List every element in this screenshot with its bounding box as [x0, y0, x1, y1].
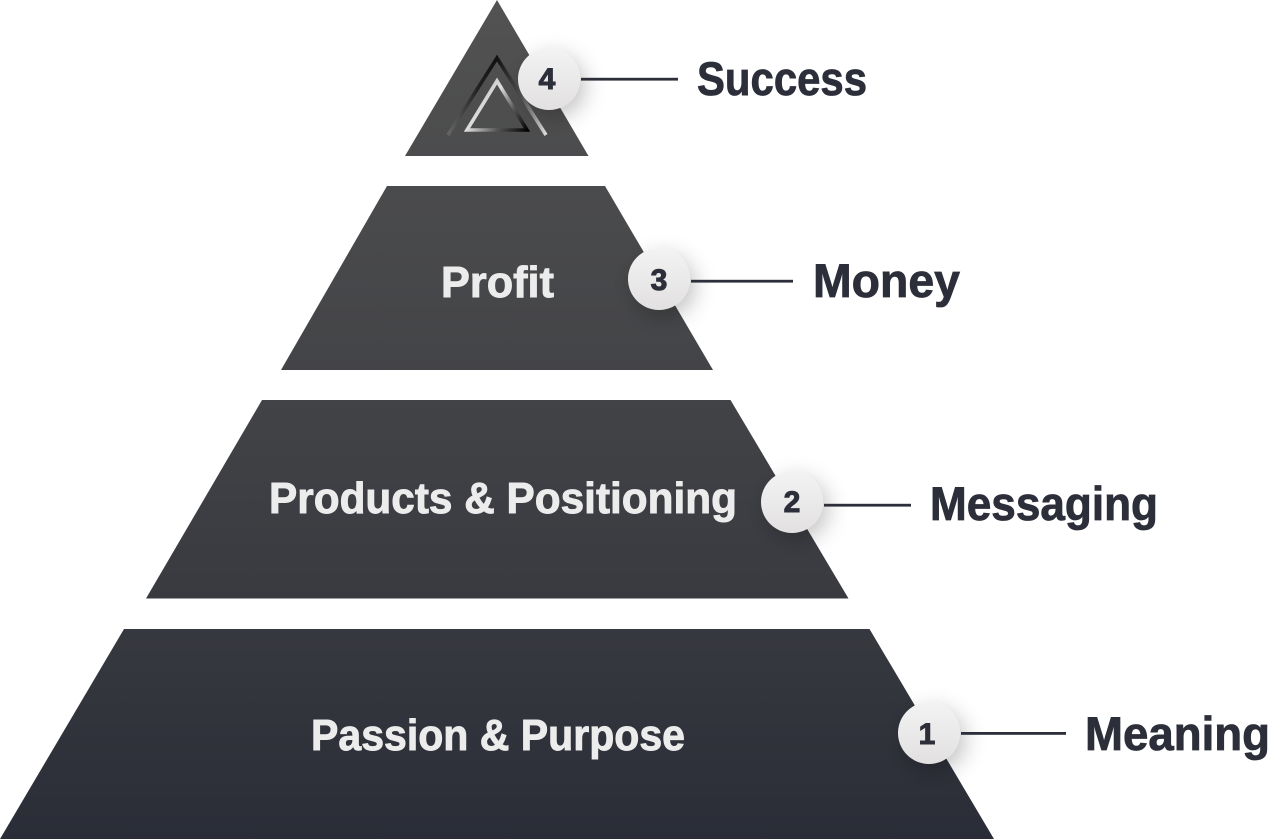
callout 2: Messaging: 2 [784, 486, 800, 519]
tier 4: Success pyramid cap [405, 0, 588, 156]
callout 4: Success: Success [697, 52, 867, 105]
callout 4: Success [518, 48, 867, 110]
callout 2: Messaging [761, 471, 1158, 533]
tier 2: Products & Positioning [146, 400, 848, 598]
tier 1: Passion & Purpose [0, 629, 994, 839]
callout 1: Meaning [898, 702, 1270, 764]
label: Products & Positioning: Products & Positioning [269, 474, 737, 523]
label: Profit: Profit [441, 258, 554, 307]
callout 3: Money [628, 248, 960, 310]
callout 1: Meaning: 1 [919, 718, 935, 751]
label: Passion & Purpose: Passion & Purpose [311, 711, 685, 760]
callout 4: Success: 4 [539, 63, 556, 96]
callout 3: Money: 3 [651, 264, 667, 297]
callout 2: Messaging: Messaging [930, 477, 1158, 530]
callout 3: Money: Money [813, 254, 960, 307]
callout 1: Meaning: Meaning [1085, 707, 1270, 760]
icon: nested triangles [448, 58, 546, 135]
tier 3: Profit [281, 186, 713, 370]
